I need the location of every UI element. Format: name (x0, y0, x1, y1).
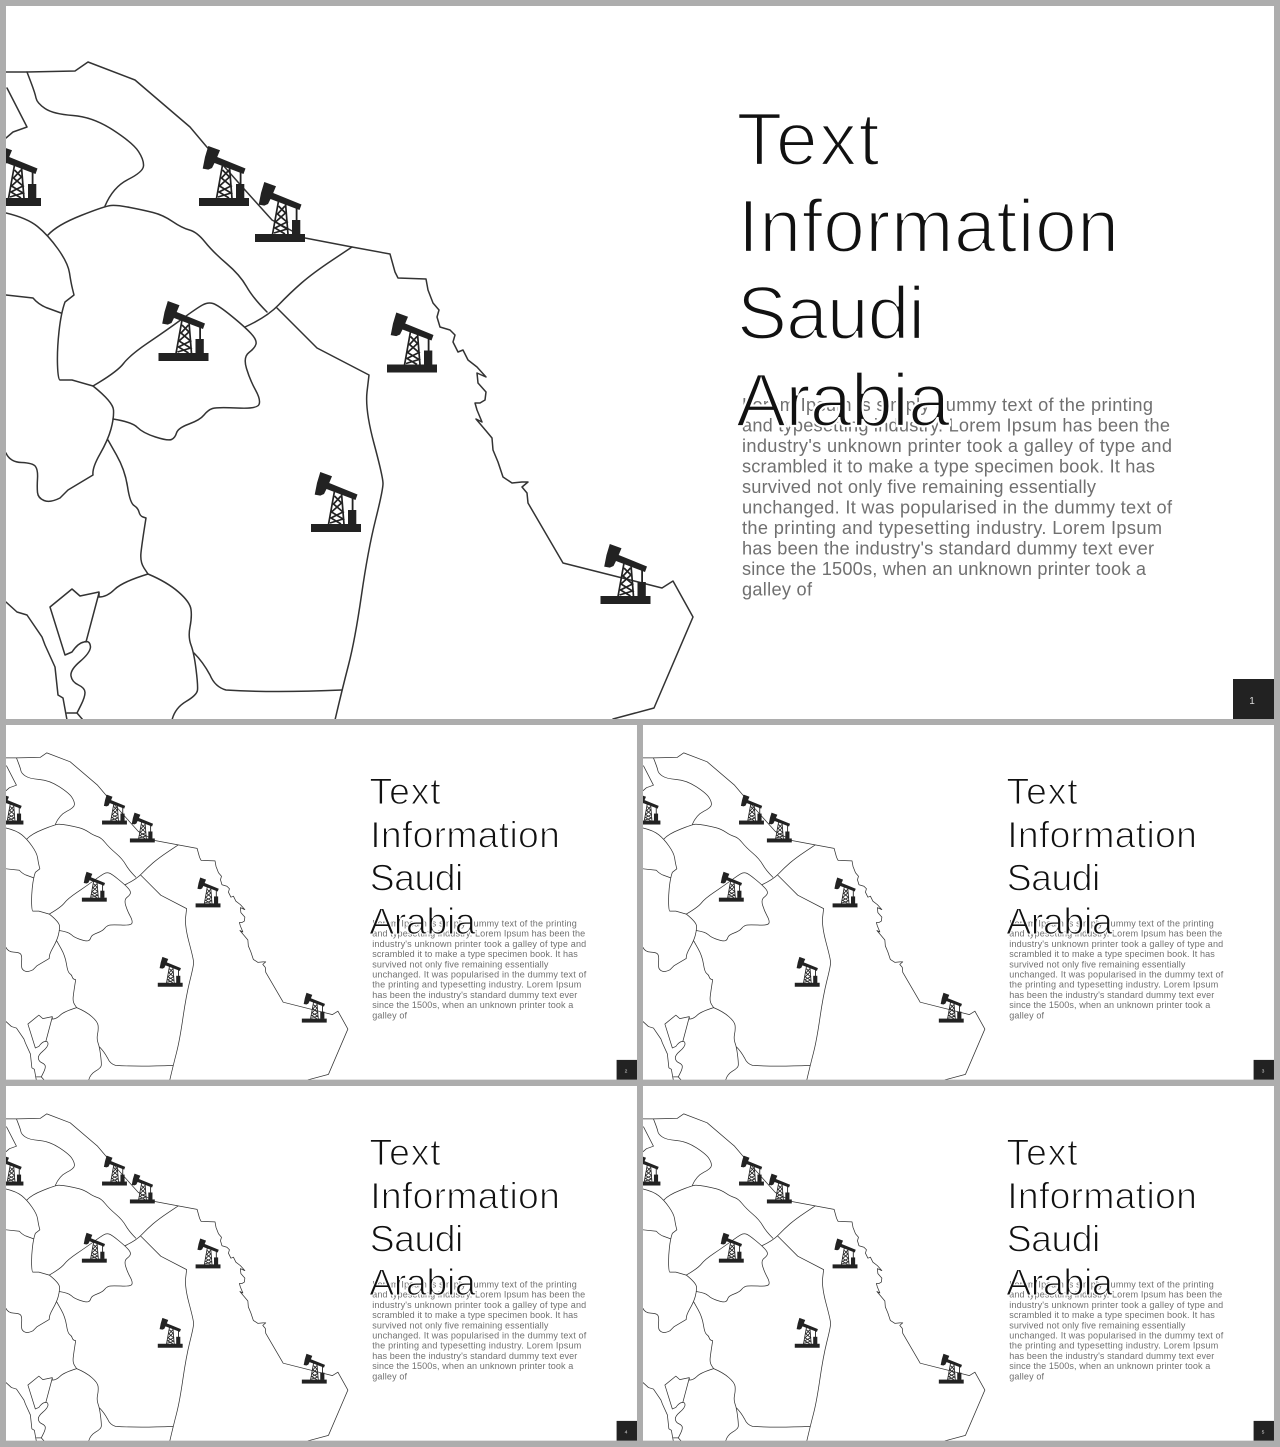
page number box: 2 (625, 1068, 628, 1074)
title: Text (1007, 1131, 1078, 1173)
map of Saudi Arabia (6, 1114, 348, 1441)
panel: slide 5 (636, 1086, 1274, 1441)
body text: galley of (1009, 1371, 1045, 1381)
title: Information (738, 184, 1119, 268)
icon: oil pump north coast (767, 813, 792, 842)
icon: oil pump north (739, 1156, 764, 1186)
title (369, 1131, 560, 1303)
body text: industry's unknown printer took a galley of type and (372, 939, 586, 949)
page number box (1254, 1060, 1274, 1080)
icon: oil pump west (6, 1156, 24, 1186)
title: Information (370, 1174, 560, 1216)
title: Information (1007, 1174, 1197, 1216)
page number box: 1 (1249, 696, 1255, 707)
icon: oil pump east (833, 1239, 857, 1268)
map of Saudi Arabia (6, 753, 348, 1080)
title: Information (370, 813, 560, 855)
map of Saudi Arabia (643, 1114, 985, 1441)
body text: industry's unknown printer took a galley of type and (1009, 1300, 1223, 1310)
body text: has been the industry's standard dummy text ever (1009, 990, 1214, 1000)
body text: unchanged. It was popularised in the dummy text of (742, 498, 1173, 518)
body text: industry's unknown printer took a galley of type and (372, 1300, 586, 1310)
body text: galley of (372, 1010, 408, 1020)
body text: galley of (742, 580, 813, 600)
body text: industry's unknown printer took a galley of type and (742, 436, 1172, 456)
body text: since the 1500s, when an unknown printer took a (1009, 1000, 1211, 1010)
icon: oil pump west (636, 1156, 660, 1186)
body text: galley of (1009, 1010, 1045, 1020)
body text: unchanged. It was popularised in the dummy text of (1009, 1331, 1224, 1341)
body text: industry's unknown printer took a galley of type and (1009, 939, 1223, 949)
body text (372, 919, 587, 1020)
title: Text (370, 1131, 441, 1173)
icon: oil pump north (199, 146, 249, 206)
title: Saudi (370, 1218, 463, 1260)
body text: has been the industry's standard dummy text ever (372, 1351, 577, 1361)
page number box: 3 (1262, 1068, 1265, 1074)
icon: oil pump east (196, 1239, 220, 1268)
body text (742, 395, 1173, 600)
icon: oil pump central (82, 1233, 107, 1263)
body text: and typesetting industry. Lorem Ipsum has been the (1009, 1290, 1222, 1300)
body text (372, 1280, 587, 1381)
title: Saudi (370, 857, 463, 899)
body text: Lorem Ipsum is simply dummy text of the printing (1009, 919, 1214, 929)
title: Text (736, 97, 880, 181)
title (738, 114, 1113, 428)
body text: and typesetting industry. Lorem Ipsum has been the (372, 929, 585, 939)
title: Text (370, 770, 441, 812)
icon: oil pump south (311, 472, 361, 532)
body text: scrambled it to make a type specimen book. It has (372, 949, 578, 959)
panel: slide 1 (0, 6, 1274, 720)
icon: oil pump south (158, 957, 183, 987)
map of Saudi Arabia (6, 62, 693, 720)
icon: oil pump central (158, 301, 208, 361)
title (1007, 779, 1194, 935)
body text (1009, 1280, 1224, 1381)
page number box: 5 (1262, 1429, 1265, 1435)
panel: slide 2 (0, 725, 637, 1080)
body text: Lorem Ipsum is simply dummy text of the printing (372, 919, 577, 929)
body text: since the 1500s, when an unknown printer took a (742, 559, 1147, 579)
body text: galley of (372, 1371, 408, 1381)
title: Arabia (1006, 900, 1113, 942)
page number box (617, 1421, 637, 1441)
icon: oil pump north (739, 795, 764, 825)
body text: and typesetting industry. Lorem Ipsum has been the (742, 416, 1170, 436)
title: Information (1007, 813, 1197, 855)
icon: oil pump south (795, 1318, 820, 1348)
page number box (1233, 679, 1274, 719)
title: Saudi (1007, 1218, 1100, 1260)
body text: unchanged. It was popularised in the dummy text of (372, 1331, 587, 1341)
body text: since the 1500s, when an unknown printer took a (372, 1000, 574, 1010)
body text: and typesetting industry. Lorem Ipsum has been the (1009, 929, 1222, 939)
page number box (1254, 1421, 1274, 1441)
body text: survived not only five remaining essentially (372, 1320, 549, 1330)
title (1006, 1131, 1197, 1303)
body text: survived not only five remaining essentially (742, 477, 1097, 497)
panel: slide 4 (0, 1086, 637, 1441)
title: Text (1007, 770, 1078, 812)
body text: survived not only five remaining essentially (372, 959, 549, 969)
icon: oil pump southeast (939, 993, 964, 1023)
icon: oil pump central (82, 872, 107, 902)
title: Saudi (737, 271, 925, 355)
body text: has been the industry's standard dummy text ever (372, 990, 577, 1000)
icon: oil pump central (719, 872, 744, 902)
title (370, 779, 557, 935)
icon: oil pump west (6, 148, 41, 206)
body text: has been the industry's standard dummy text ever (1009, 1351, 1214, 1361)
icon: oil pump north coast (130, 813, 155, 842)
body text: the printing and typesetting industry. Lorem Ipsum (1009, 1341, 1218, 1351)
icon: oil pump north coast (767, 1174, 792, 1203)
body text: the printing and typesetting industry. Lorem Ipsum (372, 1341, 581, 1351)
icon: oil pump east (196, 878, 220, 907)
page number box: 4 (625, 1429, 628, 1435)
icon: oil pump west (643, 796, 660, 825)
body text: since the 1500s, when an unknown printer took a (372, 1361, 574, 1371)
icon: oil pump southeast (302, 1354, 327, 1384)
body text: Lorem Ipsum is simply dummy text of the printing (1009, 1280, 1214, 1290)
body text: scrambled it to make a type specimen book. It has (1009, 949, 1215, 959)
title: Arabia (1006, 1261, 1113, 1303)
body text: the printing and typesetting industry. Lorem Ipsum (742, 518, 1162, 538)
icon: oil pump southeast (939, 1354, 964, 1384)
icon: oil pump north coast (130, 1174, 155, 1203)
body text: the printing and typesetting industry. Lorem Ipsum (1009, 980, 1218, 990)
title: Arabia (369, 1261, 476, 1303)
map of Saudi Arabia (643, 753, 985, 1080)
icon: oil pump north (102, 1156, 127, 1186)
body text: survived not only five remaining essentially (1009, 1320, 1186, 1330)
icon: oil pump south (158, 1318, 183, 1348)
body text: scrambled it to make a type specimen book. It has (372, 1310, 578, 1320)
icon: oil pump south (795, 957, 820, 987)
body text: scrambled it to make a type specimen book. It has (742, 456, 1155, 476)
icon: oil pump east (833, 878, 857, 907)
icon: oil pump southeast (600, 544, 650, 604)
icon: oil pump east (387, 312, 437, 372)
body text: unchanged. It was popularised in the dummy text of (1009, 970, 1224, 980)
title: Arabia (736, 358, 950, 442)
panel: slide 3 (636, 725, 1274, 1080)
icon: oil pump southeast (302, 993, 327, 1023)
page number box (617, 1060, 637, 1080)
body text: and typesetting industry. Lorem Ipsum has been the (372, 1290, 585, 1300)
body text: has been the industry's standard dummy text ever (742, 538, 1154, 558)
icon: oil pump central (719, 1233, 744, 1263)
body text: the printing and typesetting industry. Lorem Ipsum (372, 980, 581, 990)
body text: survived not only five remaining essentially (1009, 959, 1186, 969)
body text: since the 1500s, when an unknown printer took a (1009, 1361, 1211, 1371)
title: Saudi (1007, 857, 1100, 899)
body text: unchanged. It was popularised in the dummy text of (372, 970, 587, 980)
icon: oil pump north (102, 795, 127, 825)
body text: Lorem Ipsum is simply dummy text of the printing (372, 1280, 577, 1290)
icon: oil pump north coast (255, 182, 305, 242)
body text: Lorem Ipsum is simply dummy text of the printing (742, 395, 1153, 415)
body text: scrambled it to make a type specimen book. It has (1009, 1310, 1215, 1320)
title: Arabia (369, 900, 476, 942)
body text (1009, 919, 1224, 1020)
icon: oil pump west (6, 796, 24, 825)
